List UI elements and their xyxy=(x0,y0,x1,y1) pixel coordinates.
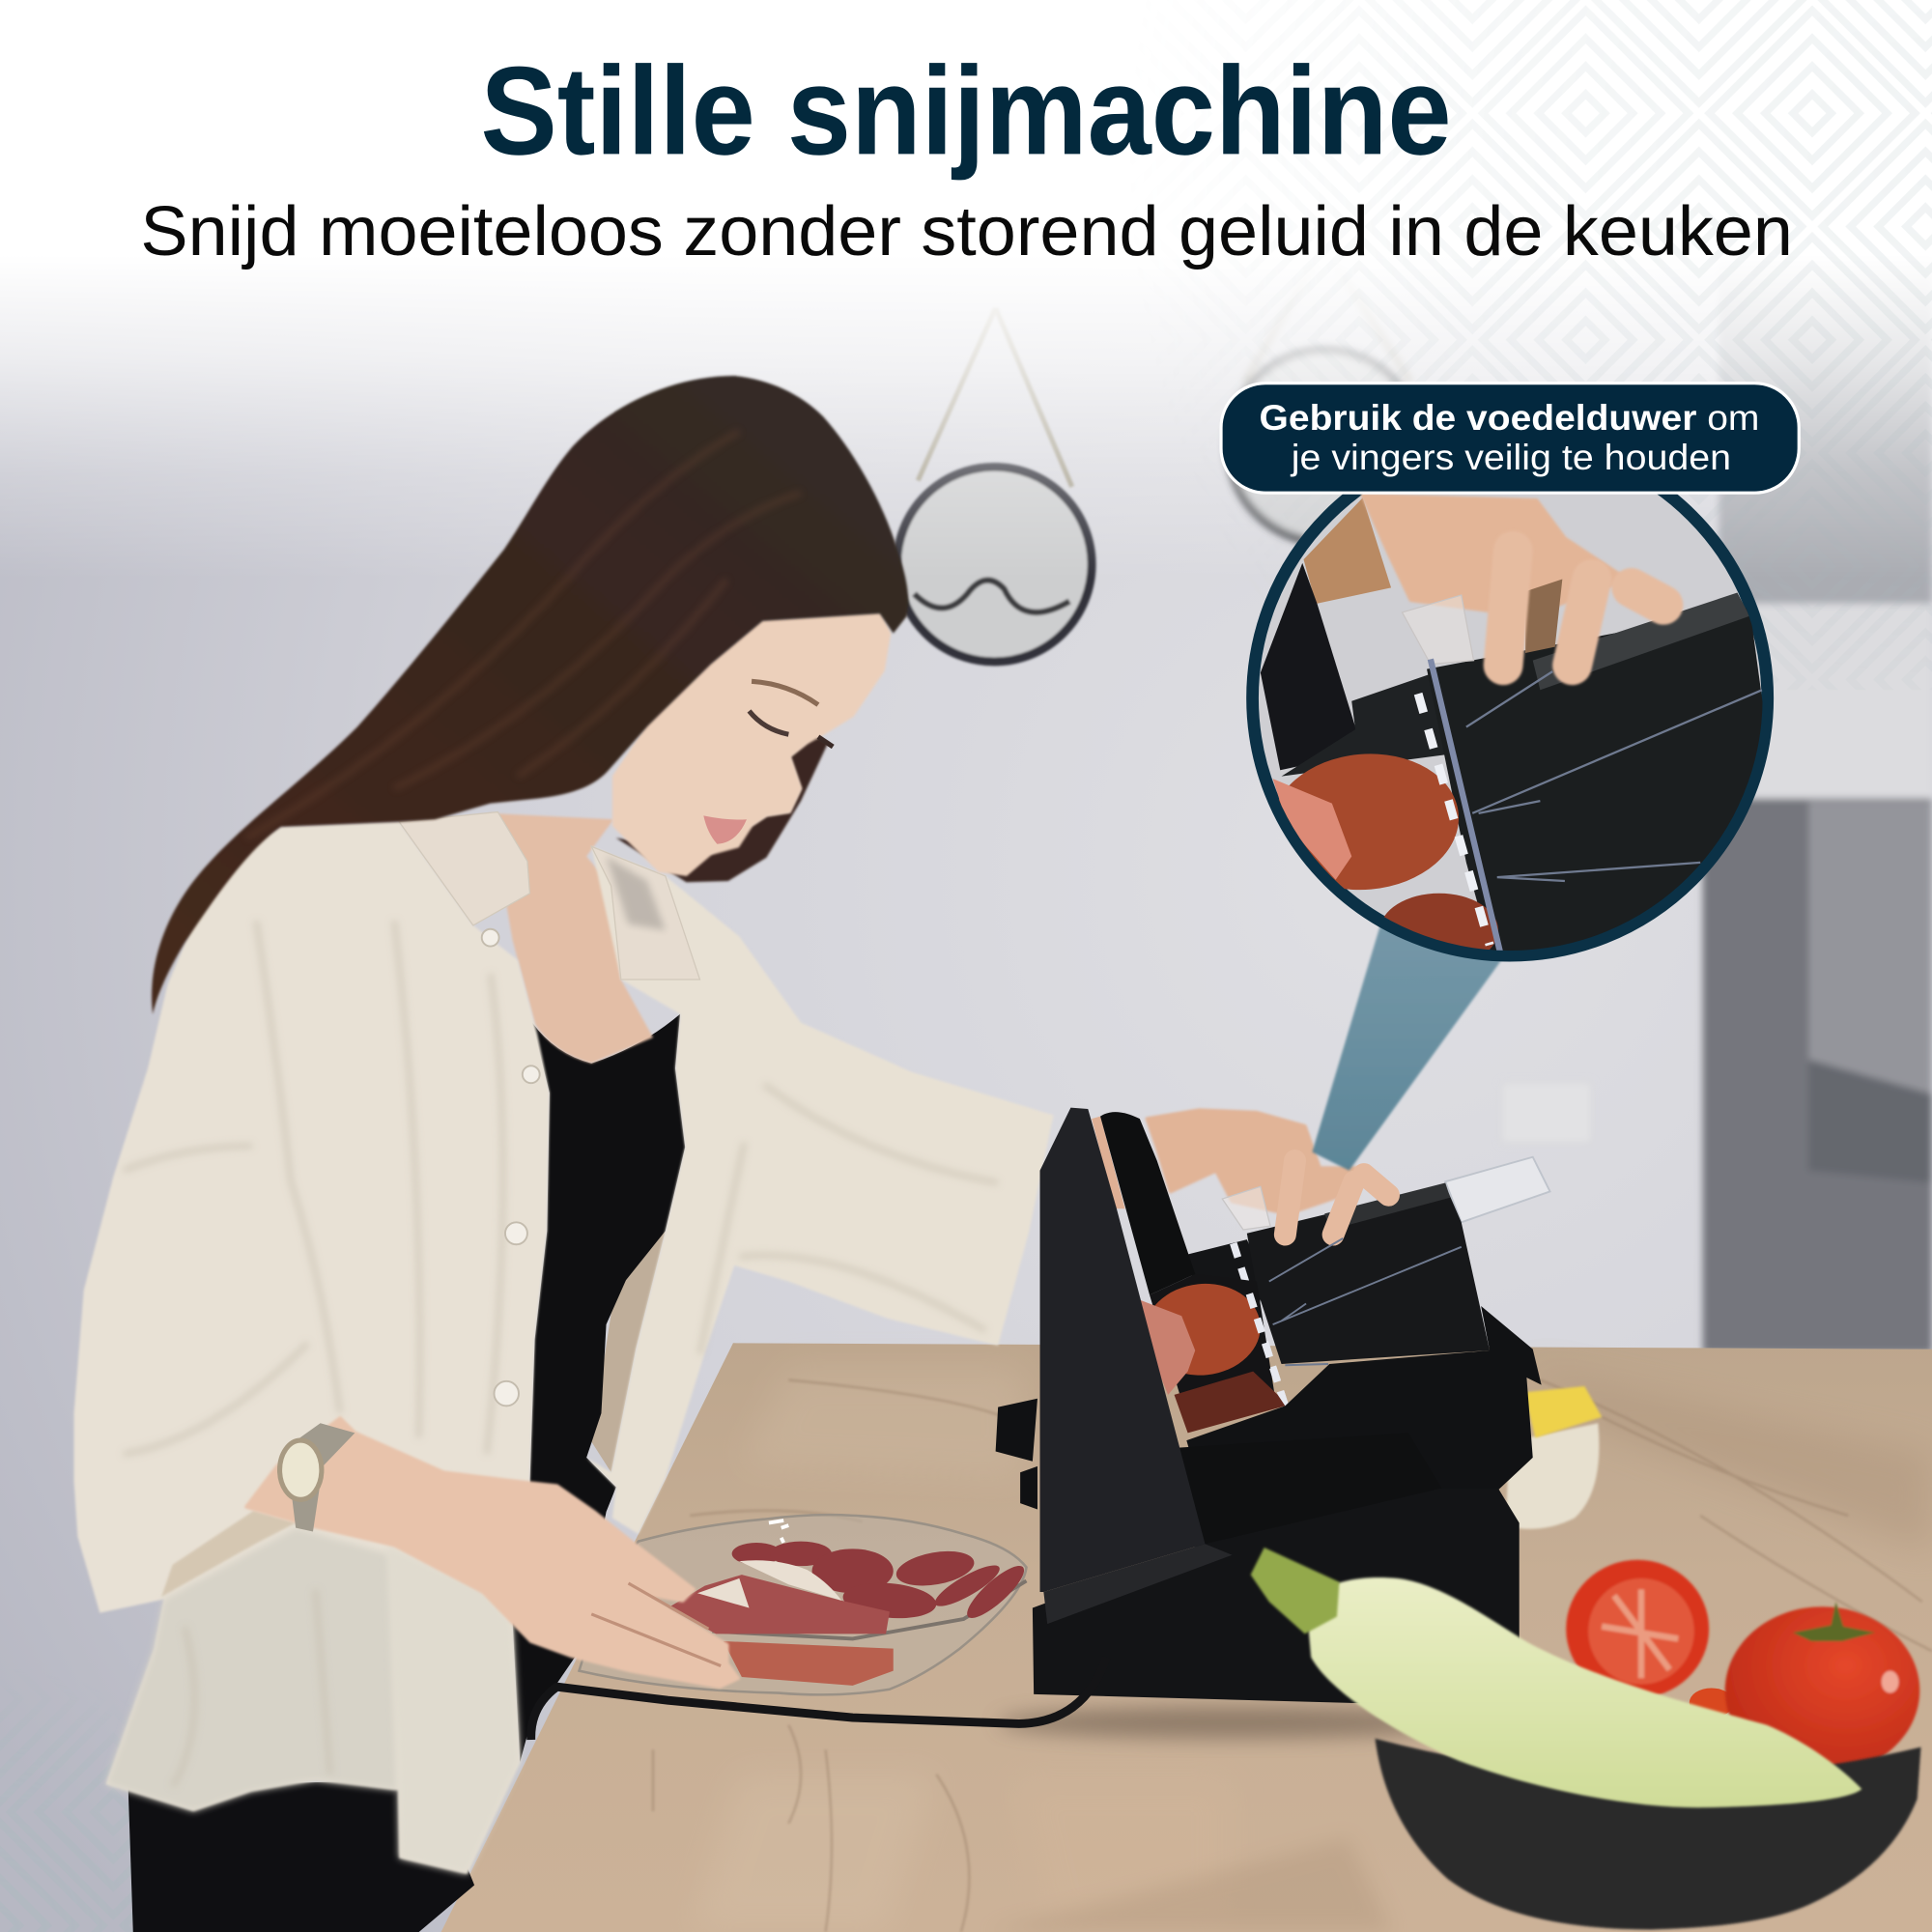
back rail xyxy=(1188,1239,1264,1306)
plate rim xyxy=(712,1580,1026,1638)
finger shadow xyxy=(1525,579,1562,653)
power cord xyxy=(531,1658,1106,1740)
hair xyxy=(152,376,908,1014)
top white gradient xyxy=(0,0,1932,579)
transparent pusher xyxy=(1222,1186,1270,1230)
right wall section xyxy=(1703,0,1932,1353)
guide lines in inset xyxy=(1466,671,1762,881)
ham xyxy=(668,1575,890,1634)
transparent pusher in inset xyxy=(1403,595,1474,665)
zucchini and tomato bowl xyxy=(1251,1548,1921,1929)
second hanging mirror xyxy=(1229,246,1421,542)
callout text line 2: je vingers veilig te houden xyxy=(1291,438,1731,477)
middle section xyxy=(1177,1433,1448,1548)
base highlight xyxy=(1043,1544,1233,1624)
dark slab xyxy=(1261,563,1355,770)
wood tone streaks xyxy=(690,1368,1932,1932)
black top xyxy=(513,1014,685,1762)
forearm in inset xyxy=(1303,497,1391,604)
inset close-up xyxy=(1246,495,1774,962)
highlight beam xyxy=(1312,918,1501,1171)
tray xyxy=(1186,1306,1542,1498)
title: Stille snijmachine xyxy=(480,40,1452,181)
icon: hanging mirror xyxy=(897,308,1092,662)
meat under glass xyxy=(724,1641,894,1686)
fingers xyxy=(1285,1161,1389,1235)
subtitle: Snijd moeiteloos zonder storend geluid in de keuken xyxy=(140,192,1793,270)
dark bowl xyxy=(1375,1739,1921,1929)
shadow under bowl xyxy=(985,1838,1392,1932)
lower sausage in inset xyxy=(1383,893,1498,951)
clear edge and teeth xyxy=(1431,659,1501,955)
hair under chin xyxy=(616,735,828,882)
small orange piece xyxy=(1690,1688,1734,1718)
woman's left forearm and hand xyxy=(246,1418,738,1687)
clear food pusher tube xyxy=(1445,1157,1550,1222)
teeth xyxy=(1234,1243,1285,1406)
shadow under slicer xyxy=(998,1707,1466,1739)
top rail xyxy=(1533,593,1749,690)
plate with meat xyxy=(579,1515,1031,1694)
callout banner xyxy=(1221,384,1799,493)
hair highlights xyxy=(246,431,801,838)
salami slices xyxy=(732,1542,1031,1625)
guide lines xyxy=(1269,1238,1462,1365)
inner shirt shade xyxy=(591,1231,666,1472)
fingers xyxy=(591,1583,721,1665)
cream bowl with lemon xyxy=(1506,1386,1602,1529)
shirt right panel and sleeve xyxy=(586,846,1054,1534)
shirt lower panel shade xyxy=(106,1528,398,1811)
chevron pattern bottom left xyxy=(0,1651,160,1932)
woman xyxy=(74,376,1054,1932)
zucchini stem xyxy=(1251,1548,1339,1634)
slicer xyxy=(996,1108,1550,1707)
handle xyxy=(996,1399,1037,1509)
wall switch xyxy=(1501,1082,1592,1144)
cut tomato xyxy=(1566,1560,1709,1698)
neck and chest xyxy=(491,813,653,1064)
palm xyxy=(1363,496,1627,616)
front panel lower xyxy=(387,1545,520,1874)
sausage in inset xyxy=(1279,753,1459,891)
base xyxy=(1033,1489,1520,1707)
shirt folds xyxy=(124,921,998,1786)
back rail xyxy=(1282,672,1450,777)
zucchini body xyxy=(1306,1577,1861,1807)
glass highlight xyxy=(769,1520,788,1543)
blade guard xyxy=(1100,1112,1195,1295)
sausage xyxy=(1140,1278,1264,1380)
holder block xyxy=(1427,608,1775,974)
arm sliver xyxy=(1092,1117,1125,1208)
clear teeth again over sausage xyxy=(1249,1293,1285,1406)
black trousers xyxy=(128,1780,474,1932)
glass plate xyxy=(579,1515,1026,1694)
sausage reflection xyxy=(1175,1372,1285,1433)
food holder xyxy=(1247,1185,1490,1364)
watch xyxy=(280,1423,355,1531)
ham fat xyxy=(697,1560,841,1608)
dark interior xyxy=(1150,1274,1275,1405)
buttons xyxy=(482,929,540,1406)
side wall xyxy=(1040,1108,1205,1592)
sleeve cuff inner xyxy=(161,1511,296,1597)
collar xyxy=(399,812,699,980)
fingers in inset xyxy=(1503,551,1663,666)
facial features xyxy=(703,681,833,844)
collar shadow xyxy=(607,856,666,930)
pink meat slice xyxy=(1140,1300,1195,1395)
face xyxy=(613,613,890,875)
callout text line 1: Gebruik de voedelduwer om xyxy=(1260,398,1759,438)
wooden table xyxy=(441,1343,1932,1932)
inset ring xyxy=(1253,440,1768,955)
shirt left sleeve and body xyxy=(74,822,550,1874)
whole tomato xyxy=(1725,1602,1919,1775)
right hand and arm xyxy=(1148,1110,1360,1213)
pink slice in inset xyxy=(1273,779,1351,880)
chevron pattern top right xyxy=(1430,0,1932,388)
holder top rail xyxy=(1324,1182,1450,1230)
